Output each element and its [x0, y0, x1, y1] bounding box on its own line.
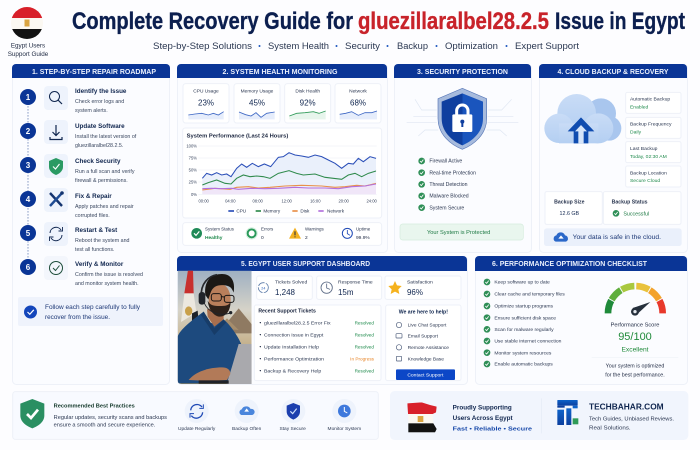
panel heading [475, 256, 687, 271]
step 4: Apply patches and repair [75, 204, 134, 210]
security checklist [418, 158, 476, 211]
line chart: system performance: 12:00 [281, 198, 293, 203]
status: warnings: 2 [305, 235, 308, 241]
step 3 [20, 154, 135, 184]
status: system: System Status [205, 227, 235, 232]
status: uptime [342, 227, 371, 241]
status: uptime: 99.9% [356, 235, 370, 241]
security checklist: Malware Blocked [429, 194, 469, 200]
backup detail cards: Backup Location [630, 170, 667, 176]
metric: network: 68% [350, 99, 366, 108]
brand text: Real Solutions. [589, 425, 631, 431]
badge caption: Egypt Users [11, 42, 45, 50]
status: errors: 0 [261, 235, 264, 241]
step 2: 2 [26, 127, 31, 136]
score text [611, 322, 659, 353]
security checklist: Real-time Protection [429, 170, 476, 176]
metric: disk health: Disk Health [295, 88, 320, 94]
step 2: Install the latest version of [75, 134, 137, 140]
subtitle: Security [345, 41, 381, 51]
step 6: 6 [26, 263, 31, 272]
stat: satisfaction [385, 276, 461, 299]
recent support tickets: Resolved [355, 368, 374, 373]
panel: performance optimization checklist [475, 256, 688, 384]
optimization checklist: Use stable internet connection [494, 339, 562, 345]
status: errors: Errors [261, 227, 274, 232]
backup status: Backup Status [612, 200, 648, 206]
backup detail cards: Secure Cloud [630, 178, 660, 184]
metric: memory usage: Memory Usage [241, 88, 274, 94]
status: warnings [289, 227, 325, 241]
title [72, 8, 685, 35]
recent support tickets: In Progress [350, 356, 375, 361]
badge caption: Support Guide [8, 51, 49, 58]
stat: response time: 15m [338, 288, 354, 297]
status strip [183, 223, 382, 245]
status: warnings: Warnings [305, 227, 325, 232]
metric: network [335, 84, 381, 123]
score text: Excellent [621, 346, 649, 353]
status: system [191, 227, 235, 241]
optimization checklist: Ensure sufficient disk space [494, 315, 556, 321]
protected status box [400, 224, 523, 240]
subtitle: Backup [397, 41, 428, 51]
step 6 [20, 256, 143, 287]
support message: Fast • Reliable • Secure [453, 427, 532, 433]
icon: Egypt map flag [407, 402, 437, 433]
circuit lines [407, 99, 518, 136]
step 6: Verify & Monitor [75, 261, 124, 268]
step 4: 4 [26, 195, 31, 204]
recent support tickets: gluezillaralbel28.2.5 Error Fix [264, 320, 331, 326]
security checklist: Firewall Active [429, 159, 462, 165]
score text: Performance Score [611, 322, 659, 328]
practice: monitor system [328, 399, 361, 432]
step 5: Reboot the system and [75, 238, 130, 244]
cloud safe callout: Your data is safe in the cloud. [573, 235, 661, 241]
icon: Egypt flag badge [11, 7, 43, 40]
gauge: performance score [608, 286, 663, 316]
practice: monitor system: Monitor System [328, 426, 361, 432]
panel: security protection [394, 64, 532, 252]
recent support tickets: Resolved [355, 332, 374, 337]
step 1: Check error logs and [75, 99, 124, 105]
backup detail cards: Daily [630, 130, 642, 136]
stat: response time: Response Time [338, 280, 373, 286]
practice: update regularly: Update Regularly [178, 426, 216, 432]
cloud safe callout [544, 228, 682, 246]
backup size [545, 192, 602, 224]
line chart: system performance: 04:00 [225, 198, 236, 203]
panel heading: 4. CLOUD BACKUP & RECOVERY [558, 67, 669, 76]
step 5 [20, 222, 130, 253]
step 1 [20, 86, 127, 114]
score note: for the best performance. [605, 372, 665, 378]
recent support tickets: Resolved [355, 344, 374, 349]
recent support tickets: Recent Support Tickets [258, 308, 316, 314]
title: gluezillaralbel28.2.5 [358, 8, 549, 35]
panel heading [12, 64, 170, 78]
best practices text [54, 403, 167, 429]
stat: satisfaction: 96% [407, 288, 423, 297]
step 1: 1 [26, 93, 31, 102]
step 3: Check Security [75, 158, 121, 165]
recent support tickets [254, 305, 381, 381]
metric cards [183, 84, 381, 123]
chart legend: CPU [236, 209, 246, 214]
timeline connector [27, 100, 29, 262]
step 5: 5 [26, 229, 31, 238]
recent support tickets: Update Installation Help [264, 344, 319, 350]
callout: follow each step [18, 297, 163, 326]
panel: cloud backup and recovery [539, 64, 688, 252]
panel heading: 3. SECURITY PROTECTION [417, 67, 508, 76]
practice: stay secure: Stay Secure [280, 426, 306, 432]
help options: Remote Assistance [408, 345, 449, 351]
optimization checklist: Scan for malware regularly [494, 327, 554, 333]
help options: We are here to help! [399, 310, 448, 316]
optimization checklist: Optimize startup programs [494, 304, 554, 310]
panel: Egypt support and brand [390, 391, 688, 440]
chart legend: Network [327, 209, 345, 214]
panel heading [394, 64, 531, 78]
optimization checklist: Monitor system resources [494, 350, 552, 356]
backup status [603, 192, 681, 224]
line chart: system performance: 75% [189, 156, 197, 161]
practice: backup often [232, 399, 262, 432]
step 4: Fix & Repair [75, 193, 112, 200]
protected status box: Your System is Protected [427, 230, 490, 236]
stat: tickets solved: 1,248 [275, 288, 296, 297]
score text: 95/100 [618, 331, 652, 343]
icon: green shield [20, 399, 44, 428]
status: system: Healthy [205, 235, 223, 241]
panel: system health monitoring [177, 64, 388, 252]
step 5: test all functions. [75, 247, 114, 253]
step 5: Restart & Test [75, 227, 118, 234]
brand logo [557, 400, 578, 425]
recent support tickets: Connection Issue in Egypt [264, 332, 324, 338]
panel heading: 6. PERFORMANCE OPTIMIZATION CHECKLIST [492, 259, 647, 268]
optimization checklist: Keep software up to date [494, 280, 550, 286]
icon: cloud upload [544, 94, 621, 143]
line chart: system performance [183, 128, 382, 218]
help options: Live Chat Support [408, 322, 447, 328]
photo: support agent [178, 270, 252, 385]
backup detail cards: Automatic Backup [630, 97, 670, 103]
stat: tickets solved: 24 [261, 286, 265, 290]
stat: tickets solved [257, 276, 312, 299]
panel heading [177, 256, 467, 271]
line chart: system performance: 00:00 [198, 198, 210, 203]
line chart: system performance: 24:00 [366, 198, 378, 203]
step 3: 3 [26, 161, 31, 170]
line chart: system performance: 25% [189, 180, 197, 185]
line chart: system performance: System Performance (Last 24 Hours) [187, 133, 288, 139]
line chart: system performance: 16:00 [310, 198, 321, 203]
subtitle: Expert Support [515, 41, 580, 51]
callout: follow each step: recover from the issue. [45, 315, 110, 321]
help options [386, 305, 461, 381]
line chart: system performance: 20:00 [338, 198, 350, 203]
step 2: Update Software [75, 123, 125, 130]
line chart: system performance: 50% [189, 168, 197, 173]
step 3: Run a full scan and verify [75, 169, 135, 175]
backup size: 12.6 GB [560, 211, 580, 217]
security checklist: System Secure [429, 205, 464, 211]
step 4: corrupted files. [75, 213, 110, 219]
optimization checklist: Clear cache and temporary files [494, 292, 565, 298]
backup detail cards: Last Backup [630, 146, 658, 152]
subtitle [153, 41, 580, 51]
subtitle: Step-by-Step Solutions [153, 41, 253, 51]
panel heading [539, 64, 687, 78]
panel: recommended best practices [13, 392, 378, 439]
line chart: system performance: 0% [191, 192, 197, 197]
panel heading: 1. STEP-BY-STEP REPAIR ROADMAP [32, 67, 156, 76]
step 2: gluezillaralbel28.2.5. [75, 143, 123, 149]
best practices text: Recommended Best Practices [54, 403, 135, 409]
optimization checklist: Enable automatic backups [494, 362, 553, 368]
practice: update regularly [178, 399, 216, 432]
recent support tickets: Resolved [355, 320, 374, 325]
step 4 [20, 188, 134, 219]
chart legend [228, 209, 345, 214]
brand text: Tech Guides, Unbiased Reviews. [589, 417, 674, 423]
recent support tickets: Performance Optimization [264, 356, 324, 362]
backup detail cards: Today, 02:30 AM [630, 154, 667, 160]
security checklist: Threat Detection [429, 182, 468, 188]
subtitle: Optimization [445, 41, 498, 51]
score note [605, 364, 665, 378]
best practices text: ensure a smooth and secure experience. [54, 423, 155, 429]
panel heading: 5. EGYPT USER SUPPORT DASHBOARD [241, 259, 371, 268]
metric: CPU usage [183, 84, 229, 123]
step 6: Confirm the issue is resolved [75, 272, 143, 278]
line chart: system performance: 08:00 [252, 198, 264, 203]
score note: Your system is optimized [606, 364, 664, 370]
stat: response time [317, 276, 382, 299]
recent support tickets: Backup & Recovery Help [264, 368, 322, 374]
title: Complete Recovery Guide for [72, 8, 353, 35]
metric: CPU usage: 23% [198, 99, 214, 108]
icon: security shield [438, 88, 487, 149]
panel heading: 2. SYSTEM HEALTH MONITORING [222, 67, 338, 76]
backup detail cards: Backup Frequency [630, 122, 672, 128]
metric: memory usage [234, 84, 280, 123]
support message: Users Across Egypt [453, 415, 513, 422]
metric: network: Network [349, 88, 367, 94]
metric: disk health [285, 84, 331, 123]
status: uptime: Uptime [356, 227, 371, 232]
badge caption [8, 42, 49, 58]
help options: Email Support [408, 334, 439, 340]
step 6: and monitor system health. [75, 281, 139, 287]
optimization checklist [484, 279, 565, 368]
backup detail cards [626, 92, 681, 187]
line chart: system performance: 100% [186, 144, 197, 149]
step 3: firewall & permissions. [75, 178, 128, 184]
status: errors [246, 227, 274, 241]
metric: CPU usage: CPU Usage [193, 88, 219, 94]
practice: stay secure [280, 399, 306, 432]
metric: disk health: 92% [300, 99, 316, 108]
step 1: Identify the Issue [75, 88, 127, 95]
brand text: TECHBAHAR.COM [589, 402, 664, 412]
step 2 [20, 120, 137, 149]
help options: Knowledge Base [408, 356, 444, 362]
metric: memory usage: 45% [249, 99, 265, 108]
backup detail cards: Enabled [630, 105, 649, 111]
support message [453, 405, 532, 433]
subtitle: System Health [268, 41, 329, 51]
stat: satisfaction: Satisfaction [407, 280, 433, 286]
panel heading [177, 64, 387, 78]
panel: step-by-step repair roadmap [12, 64, 170, 384]
brand text [589, 402, 674, 431]
chart legend: Memory [263, 209, 281, 214]
backup size: Backup Size [554, 200, 585, 206]
panel: Egypt user support dashboard [177, 256, 468, 385]
callout: follow each step: Follow each step carefully to fully [45, 305, 140, 311]
step 1: system alerts. [75, 108, 108, 114]
support message: Proudly Supporting [453, 405, 512, 412]
chart legend: Disk [300, 209, 310, 214]
stat: tickets solved: Tickets Solved [275, 280, 307, 286]
practice: backup often: Backup Often [232, 426, 262, 432]
backup status: Successful [623, 211, 649, 217]
best practices text: Regular updates, security scans and backups [54, 415, 167, 421]
contact support button: Contact Support [407, 372, 444, 378]
